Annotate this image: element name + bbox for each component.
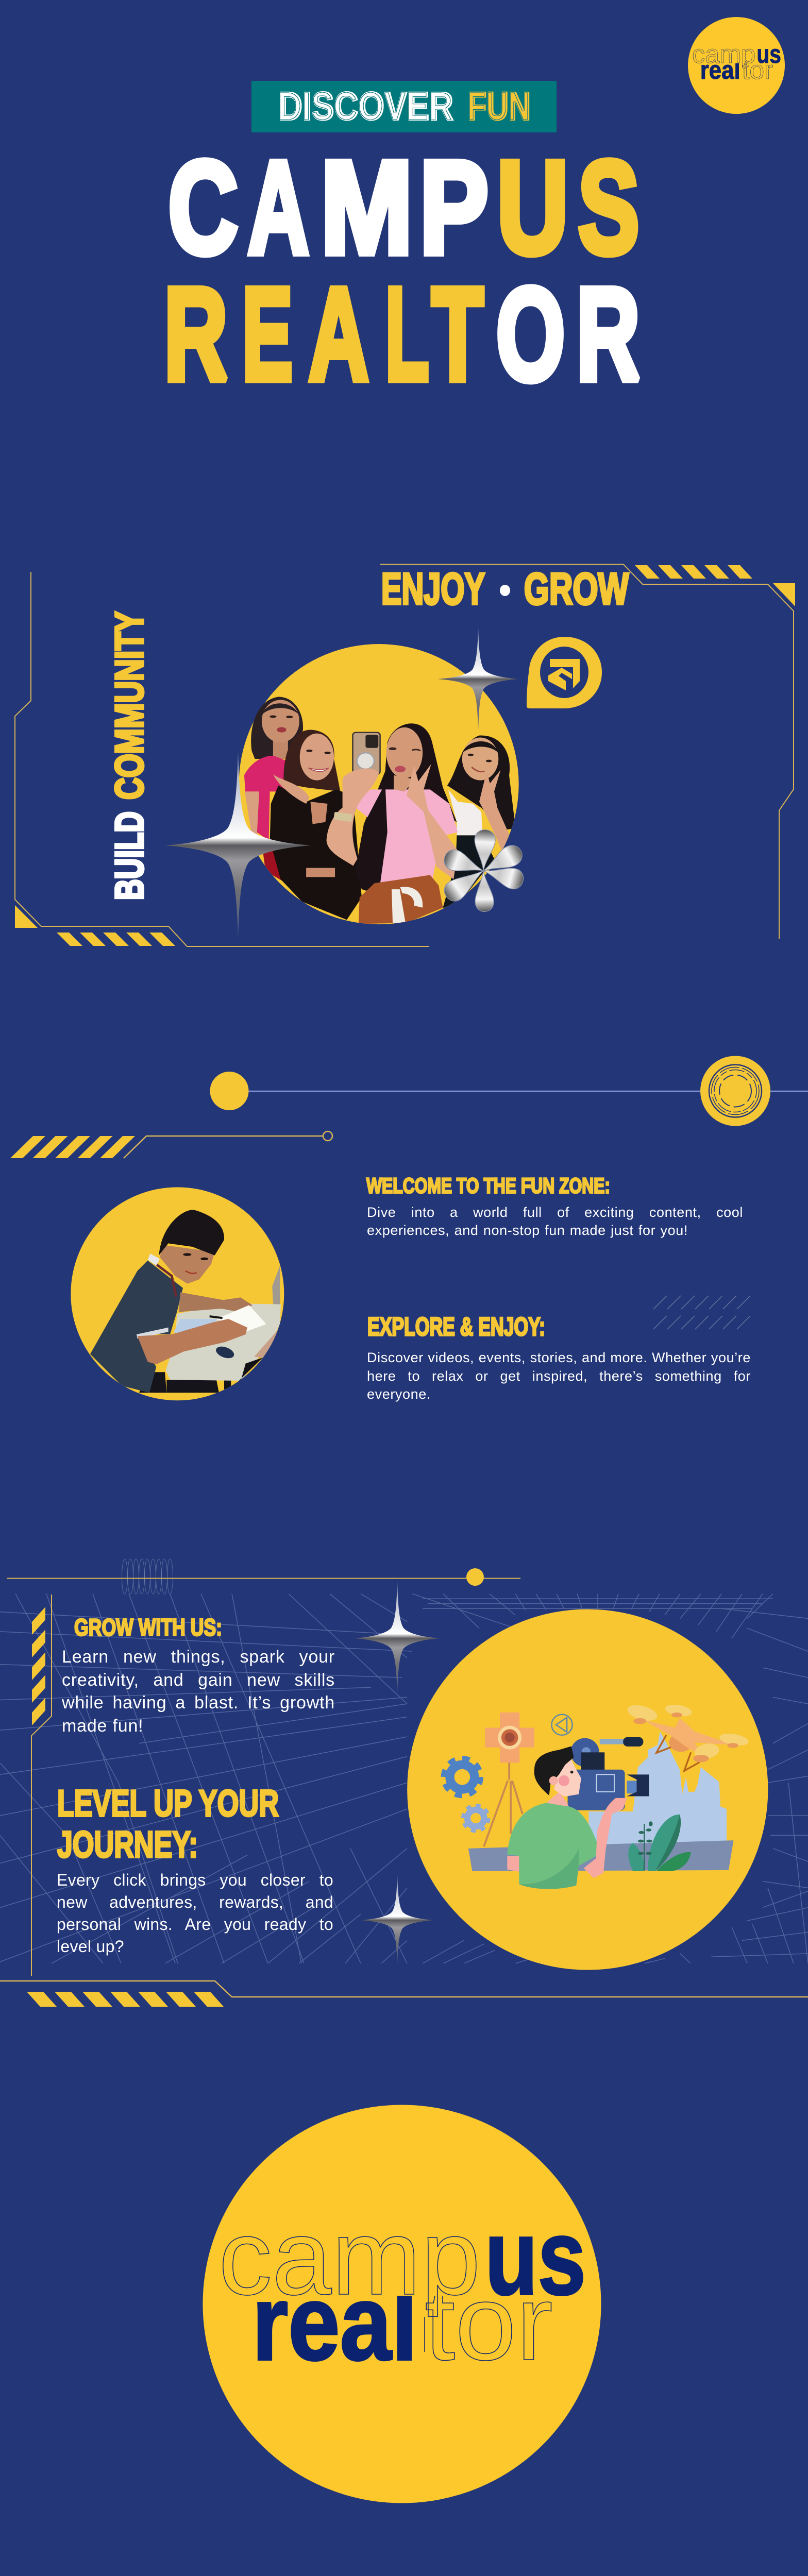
text block: grow body: creativity, and gain new skills xyxy=(62,1670,335,1690)
hatch marks xyxy=(653,1296,750,1329)
frame: bottom left xyxy=(15,572,429,946)
large campus realtor logo xyxy=(203,2105,601,2503)
title: realtor: R xyxy=(576,261,640,408)
heading: enjoy grow: GROW xyxy=(524,565,629,614)
title: realtor: R xyxy=(164,261,228,408)
heading: explore and enjoy: EXPLORE & ENJOY: xyxy=(367,1312,545,1341)
illustration: videographer with drone xyxy=(407,1609,768,1970)
connector line with dots xyxy=(210,1056,808,1126)
star: large silver xyxy=(165,752,311,939)
text block: grow body: made fun! xyxy=(62,1716,143,1735)
title: campus: U xyxy=(497,134,568,281)
text block: welcome body: experiences, and non-stop fun made just for you! xyxy=(367,1223,688,1238)
heading: build community: BUILD xyxy=(107,811,152,900)
heading: level up your journey: LEVEL UP YOUR xyxy=(57,1783,279,1824)
heading: grow with us: GROW WITH US: xyxy=(74,1614,222,1640)
text block: explore body xyxy=(367,1350,751,1402)
title: campus: M xyxy=(321,134,413,281)
text block: explore body: Discover videos, events, stories, and more. Whether you’re xyxy=(367,1350,751,1365)
text block: explore body: here to relax or get inspired, there’s something for xyxy=(367,1368,751,1384)
text block: welcome body xyxy=(367,1205,743,1238)
text block: level up body: personal wins. Are you ready to xyxy=(57,1915,333,1934)
stripes with connector xyxy=(10,1131,332,1158)
icon: location pin with arrows xyxy=(527,637,602,708)
heading: level up your journey xyxy=(57,1783,279,1866)
text block: welcome body: Dive into a world full of exciting content, cool xyxy=(367,1205,743,1220)
heading: enjoy grow: ENJOY xyxy=(381,565,485,614)
star: small silver top xyxy=(437,628,519,731)
drone xyxy=(626,1702,749,1771)
person xyxy=(507,1746,627,1889)
title: campus: A xyxy=(248,134,309,281)
large campus realtor logo: real xyxy=(252,2263,417,2383)
girl centre xyxy=(327,723,458,924)
gears xyxy=(443,1758,489,1831)
girl in black blazer xyxy=(270,730,362,920)
text block: level up body: Every click brings you closer to xyxy=(57,1871,333,1889)
tripod light xyxy=(484,1713,534,1846)
play icon xyxy=(551,1715,573,1735)
phone xyxy=(353,733,380,774)
side rail with stripes xyxy=(31,1595,52,1976)
star: silver lower xyxy=(361,1875,434,1965)
icon: silver flower xyxy=(441,829,526,912)
discover fun badge: FUN xyxy=(468,84,531,129)
title: realtor: A xyxy=(309,261,368,408)
city xyxy=(588,1732,727,1846)
corner logo badge: real xyxy=(700,55,740,84)
title: campus: P xyxy=(419,134,489,281)
title: campus: C xyxy=(169,134,238,281)
text block: level up body xyxy=(57,1871,333,1956)
bottom frame with stripes xyxy=(0,1981,808,2007)
title: realtor: T xyxy=(432,261,483,408)
large campus realtor logo: tor xyxy=(425,2263,553,2383)
title: realtor: E xyxy=(242,261,293,408)
text block: grow body xyxy=(62,1647,335,1735)
corner logo badge: us xyxy=(756,39,781,69)
camera xyxy=(568,1737,649,1810)
title: campus: S xyxy=(578,134,639,281)
rule with coil and dot xyxy=(7,1559,520,1594)
discover fun badge xyxy=(251,81,557,132)
title: realtor: O xyxy=(496,261,565,408)
girl back left xyxy=(244,697,303,881)
heading: enjoy grow xyxy=(381,565,629,614)
text block: grow body: Learn new things, spark your xyxy=(62,1647,335,1667)
title: realtor: L xyxy=(385,261,429,408)
plants xyxy=(628,1815,691,1871)
photo: student writing at a desk xyxy=(71,1187,284,1400)
large campus realtor logo: us xyxy=(485,2198,586,2317)
perspective grid background xyxy=(0,1594,808,1963)
ground xyxy=(468,1840,733,1871)
girl right xyxy=(443,736,515,908)
text block: explore body: everyone. xyxy=(367,1386,431,1402)
frame: top right xyxy=(380,565,795,939)
text block: grow body: while having a blast. It’s growth xyxy=(62,1693,335,1713)
star: silver upper xyxy=(355,1581,440,1696)
title: realtor xyxy=(164,261,640,408)
title: campus xyxy=(169,134,639,281)
photo: group of four students xyxy=(239,644,519,924)
corner logo badge xyxy=(688,17,785,114)
large campus realtor logo: camp xyxy=(218,2198,481,2317)
corner logo badge: camp xyxy=(692,39,755,69)
discover fun badge: DISCOVER xyxy=(278,84,453,129)
text block: level up body: new adventures, rewards, and xyxy=(57,1893,333,1911)
corner logo badge: tor xyxy=(742,55,773,84)
heading: welcome: WELCOME TO THE FUN ZONE: xyxy=(366,1174,610,1197)
heading: build community xyxy=(107,612,152,900)
heading: build community: COMMUNITY xyxy=(107,612,152,800)
heading: level up your journey: JOURNEY: xyxy=(57,1824,198,1866)
text block: level up body: level up? xyxy=(57,1937,124,1956)
